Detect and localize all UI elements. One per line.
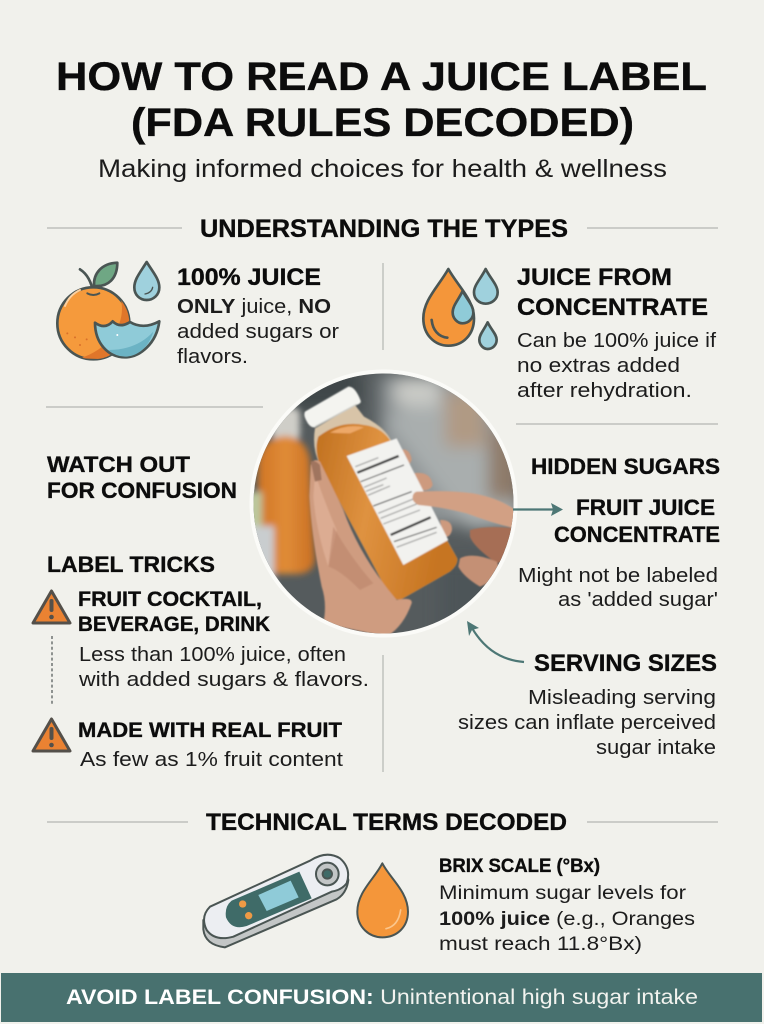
text block: added sugars or [177,321,339,343]
text block: after rehydration. [517,380,692,402]
text block: Can be 100% juice if [517,330,716,352]
bottle cap [304,387,361,427]
text block: made with real fruit [78,719,343,771]
heading: understanding the types: UNDERSTANDING THE TYPES [200,215,568,243]
subtitle: Making informed choices for health & wellness [98,155,667,183]
text block: flavors. [177,346,248,368]
text block [177,296,339,368]
heading: watch out for confusion: FOR CONFUSION [47,478,237,503]
text block: no extras added [517,355,680,377]
icon: warning triangle [33,719,70,751]
text block: ONLY juice, NO [177,296,331,318]
text block: brix scale: Minimum sugar levels for [439,882,687,904]
heading: CONCENTRATE [517,294,708,321]
juice [317,424,457,600]
blurred background bottle [254,405,318,580]
text block: serving sizes: Misleading serving [528,687,716,709]
title: HOW TO READ A JUICE LABEL [56,55,707,99]
text block: made with real fruit: MADE WITH REAL FRUIT [78,719,342,742]
text block: fruit cocktail: Less than 100% juice, often [79,644,346,666]
text block: fruit cocktail: with added sugars & flavors. [78,669,369,691]
icon: warning triangle [33,591,70,623]
text block: brix scale [439,855,695,955]
bottle glass [314,405,457,600]
icon: orange and blue drops [423,269,498,349]
text block: made with real fruit: As few as 1% fruit content [80,749,343,771]
heading: 100% JUICE [177,264,321,291]
footer banner: AVOID LABEL CONFUSION: Unintentional high sugar intake [66,986,698,1009]
text block: serving sizes: sizes can inflate perceived [458,712,716,734]
panel: 100% juice [57,262,339,368]
pointing finger [413,491,515,528]
text block: brix scale: 100% juice (e.g., Oranges [439,908,695,930]
icon: brix refractometer and drop [203,855,408,947]
text block: serving sizes [458,650,717,759]
photo: hand holding juice bottle [248,365,520,640]
nutrition label [347,438,448,565]
heading: watch out for confusion [47,452,237,503]
text block: fruit juice concentrate: CONCENTRATE [554,522,720,547]
arrow: photo to hidden sugars [513,503,563,516]
text block: fruit juice concentrate: as 'added sugar' [558,589,718,611]
fingers behind the bottle [400,450,452,537]
title [56,55,707,145]
text block: brix scale: must reach 11.8°Bx) [439,933,642,955]
text block: fruit cocktail: BEVERAGE, DRINK [78,613,270,636]
text block: serving sizes: SERVING SIZES [534,650,717,677]
heading: label tricks: LABEL TRICKS [47,552,215,577]
heading: technical terms decoded: TECHNICAL TERMS DECODED [206,809,567,836]
text block: fruit juice concentrate: Might not be labeled [518,565,718,587]
text block: fruit cocktail: FRUIT COCKTAIL, [78,588,262,611]
panel: juice from concentrate [423,264,716,402]
text block: brix scale: BRIX SCALE (°Bx) [439,855,600,877]
arrow: serving sizes to photo [467,621,524,662]
footer banner [1,973,762,1022]
heading: watch out for confusion: WATCH OUT [47,452,191,477]
title: (FDA RULES DECODED) [131,101,634,145]
text block [517,330,716,402]
palm and thumb [309,460,412,637]
heading: JUICE FROM [517,264,672,291]
heading: hidden sugars: HIDDEN SUGARS [531,454,720,479]
heading [517,264,708,321]
icon: orange with juice bowl [57,262,159,360]
text block: fruit juice concentrate [518,495,720,611]
text block: fruit cocktail [78,588,369,691]
text block: serving sizes: sugar intake [596,737,716,759]
text block: fruit juice concentrate: FRUIT JUICE [576,495,715,520]
